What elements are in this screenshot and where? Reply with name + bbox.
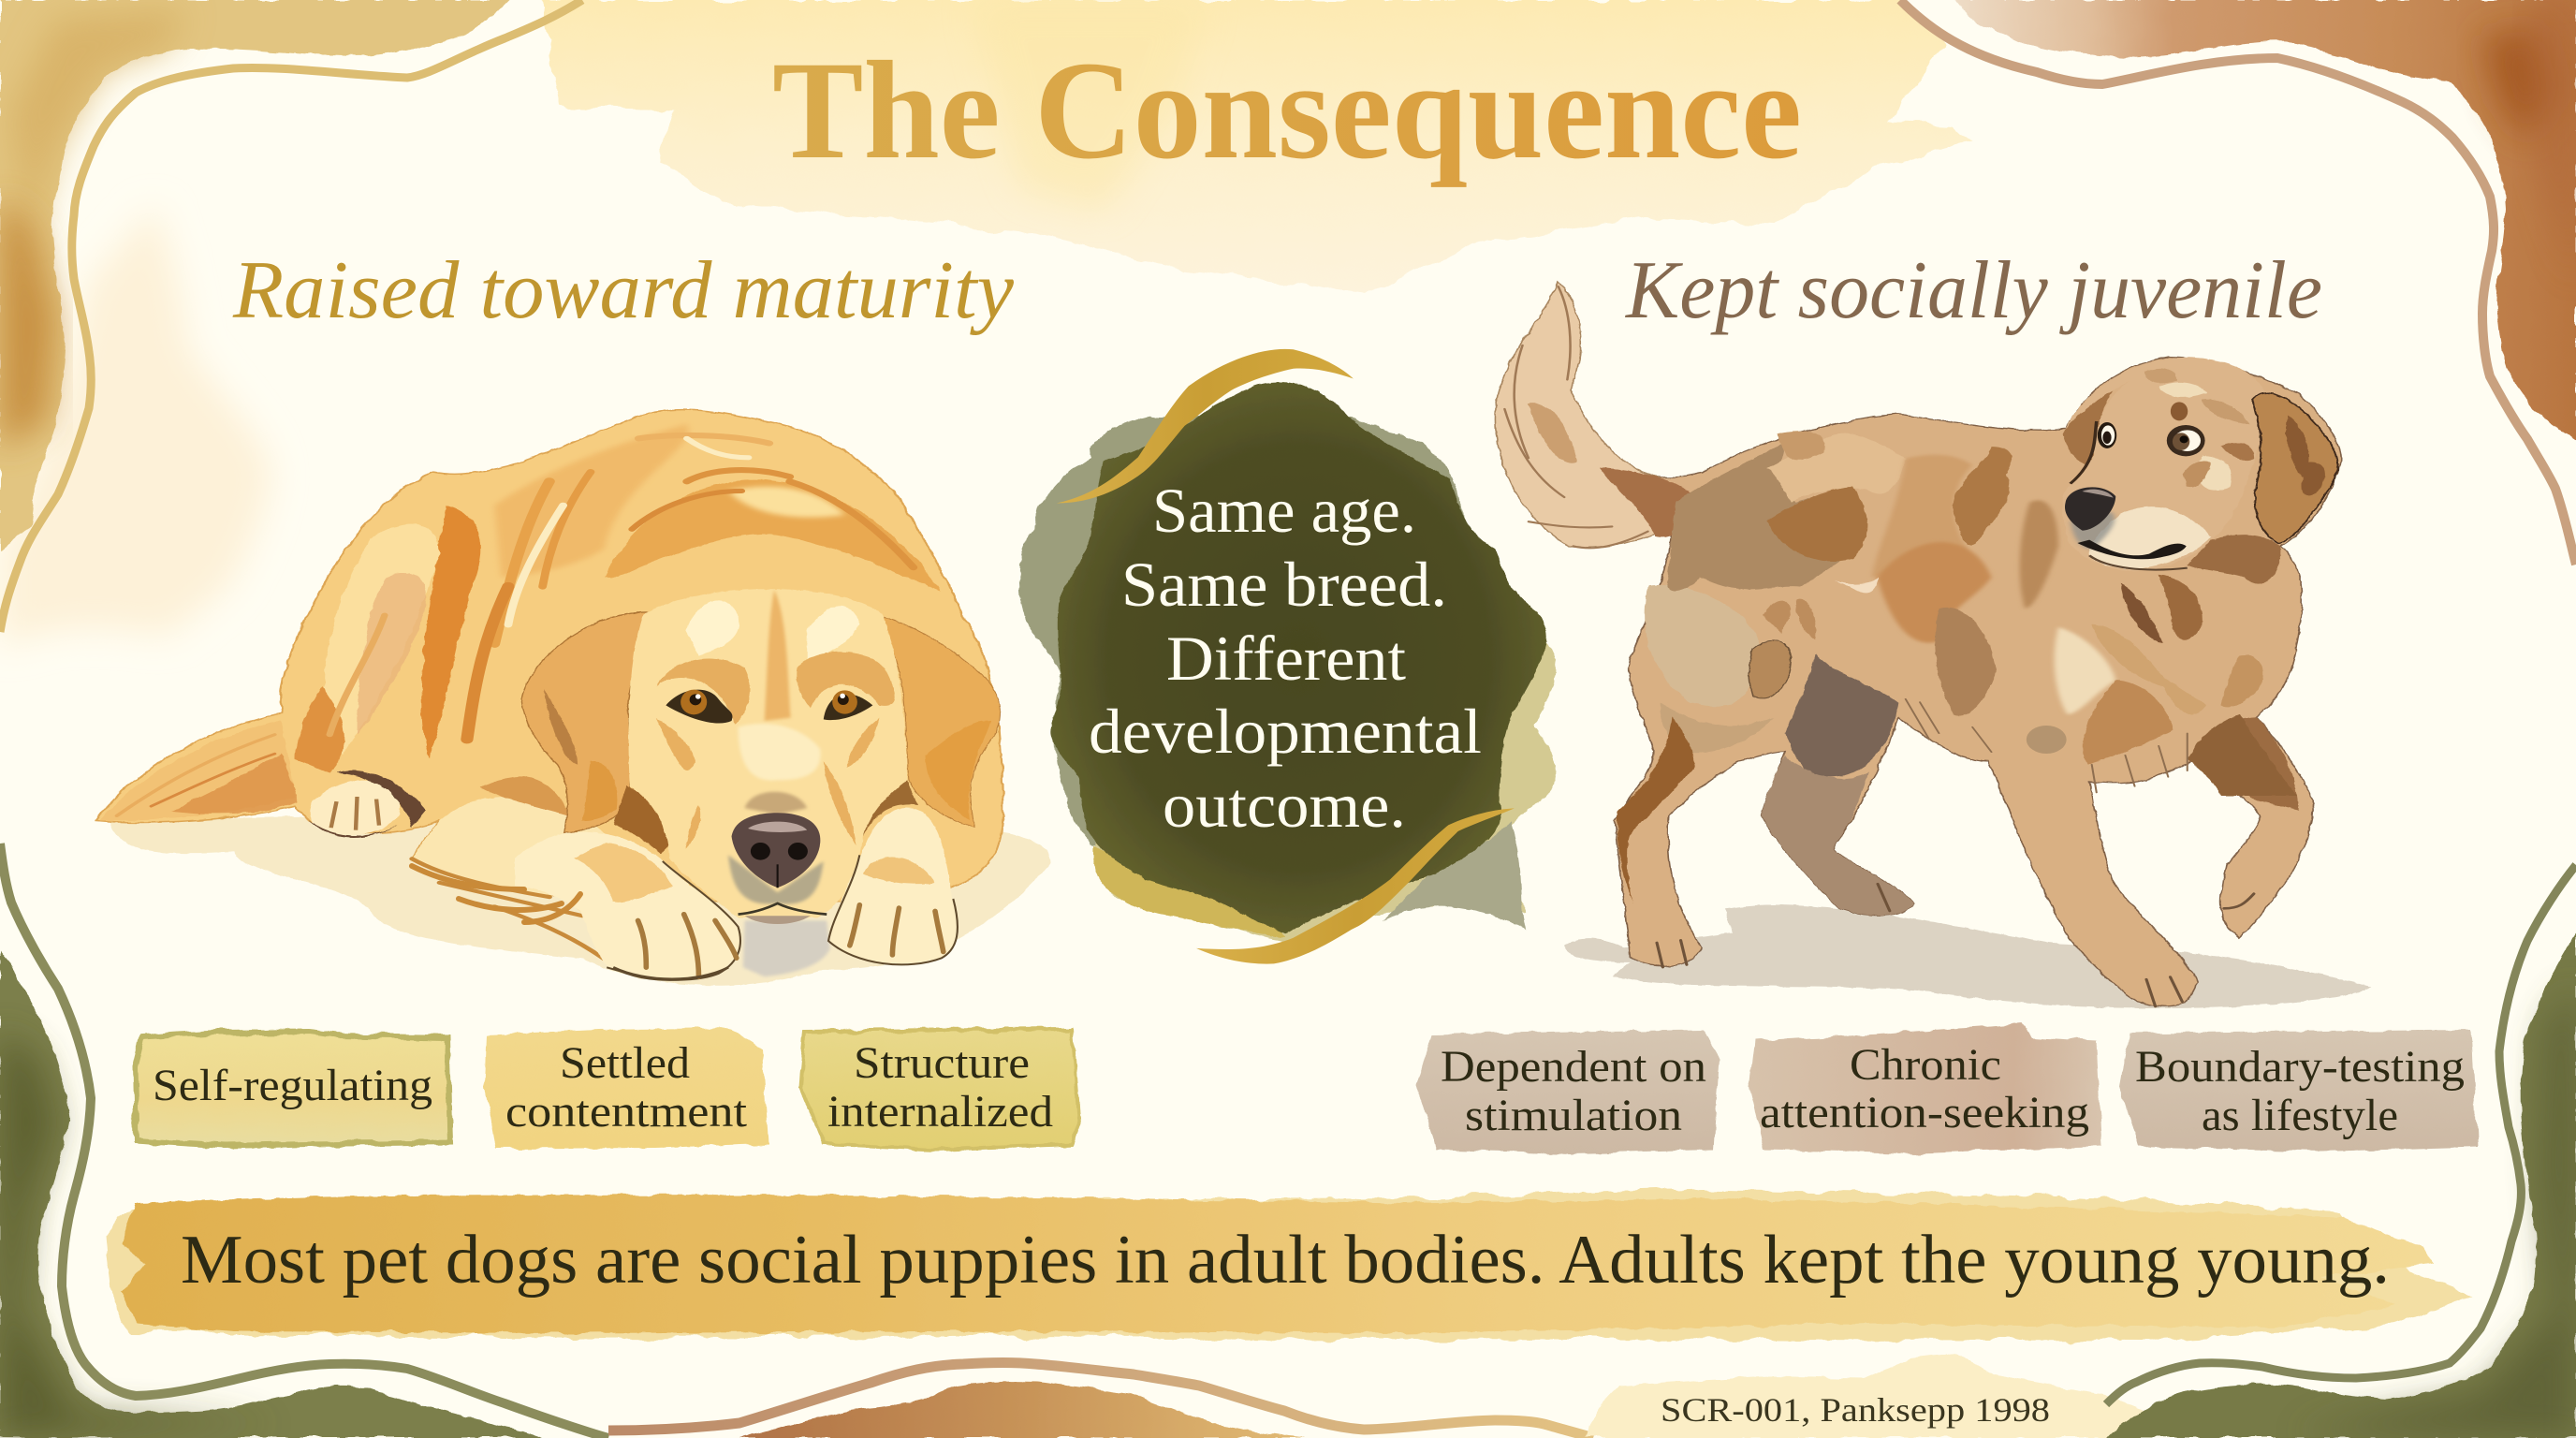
chest shade (481, 776, 570, 815)
tag: boundary-testing as lifestyle (2120, 1030, 2478, 1152)
left brow (656, 659, 750, 724)
side chest patch (2220, 655, 2262, 707)
haunch highlight (324, 524, 440, 754)
watercolor wash: citation background (1586, 1353, 2152, 1438)
right foreleg patch (863, 858, 935, 884)
left ear sliver (2063, 381, 2120, 465)
left ear (521, 612, 663, 833)
centre badge text: Same breed. (1121, 549, 1447, 620)
corner wash: bottom left olive (0, 949, 543, 1438)
back upper shading (494, 424, 688, 577)
small grey patch (2027, 726, 2067, 754)
rump rust (1600, 468, 1702, 537)
shoulder patch (1954, 447, 2012, 545)
dog shadow (1564, 905, 2370, 1008)
tag: structure internalized (800, 1029, 1079, 1150)
head patches (2144, 368, 2254, 491)
belly fur strands (412, 866, 580, 922)
back fur arc (605, 480, 941, 592)
haunch orange streak (421, 506, 480, 758)
takeaway banner (105, 1189, 2472, 1341)
brow spot (2171, 402, 2188, 420)
centre badge text: Same age. (1152, 475, 1416, 546)
centre badge: olive watercolor blob (1019, 349, 1556, 964)
frame line: bottom left olive (0, 844, 608, 1438)
dog shadow (110, 815, 1051, 986)
fur fringe strokes (1906, 699, 2188, 793)
watercolor wash: title background (543, 0, 1971, 293)
illustration: anxious brown dog walking (1495, 282, 2370, 1008)
mouth (2077, 540, 2187, 559)
back pale area (1767, 433, 1906, 503)
corner wash: top left darker mottling (9, 9, 187, 243)
ear patches (2287, 415, 2324, 496)
face shade (613, 786, 672, 854)
banner text: Most pet dogs are social puppies in adult bodies. Adults kept the young young. (181, 1222, 2390, 1299)
grey muzzle (728, 855, 824, 904)
lower chest brown (2084, 681, 2173, 765)
corner wash: top right rust spot (2481, 28, 2560, 140)
pale olive outer wash (1019, 411, 1502, 871)
far rear leg (1762, 756, 1913, 916)
gold brush stroke top (1057, 349, 1354, 503)
banner wash (122, 1195, 2434, 1333)
right face shade (863, 780, 918, 836)
citation: SCR-001, Panksepp 1998 (1661, 1391, 2050, 1429)
right foreleg (830, 808, 957, 963)
back paw shadow (309, 770, 426, 837)
flank small patches (1763, 598, 1816, 639)
centre badge text: developmental (1089, 696, 1482, 767)
centre badge text: Different (1166, 623, 1406, 694)
right eye (824, 690, 872, 720)
frame line: top right tan (1900, 0, 2576, 565)
tail inner patch (1529, 404, 1576, 463)
upper flank orange (1872, 455, 1972, 578)
tag: settled contentment: Settled (560, 1038, 690, 1088)
corner wash: bottom right dark mottling (2293, 983, 2576, 1438)
corner wash: bottom left dark mottling (0, 1030, 281, 1438)
left foreleg patch (574, 843, 672, 902)
toe marks (1657, 884, 2254, 1006)
neck dark (2188, 535, 2280, 584)
tag: dependent on stimulation (1416, 1030, 1720, 1153)
chest mid patch (2092, 624, 2206, 714)
centre badge text: outcome. (1163, 770, 1406, 841)
banner pale edge (105, 1189, 2472, 1341)
golden lower right wash (1095, 628, 1556, 942)
corner wash: top left gold (0, 0, 508, 550)
heading: raised toward maturity: Raised toward maturity (232, 245, 1015, 336)
right paw toes (850, 905, 944, 955)
left ear shade (545, 690, 578, 765)
right paw outline (828, 855, 958, 964)
tag: self-regulating (135, 1032, 450, 1146)
centre badge text (1089, 475, 1482, 841)
back paw toes (331, 797, 379, 830)
nose (2065, 487, 2115, 531)
lower lip line (2089, 555, 2188, 570)
gold brush stroke bottom (1196, 808, 1515, 964)
right brow (797, 652, 895, 709)
corner wash: left orange deepening (0, 197, 56, 449)
face base (629, 589, 907, 917)
left eye (2098, 422, 2116, 448)
throat brown (2159, 574, 2203, 640)
watercolor wash: left pale peach (0, 206, 271, 646)
left ear orange (582, 761, 617, 821)
frame line: bottom centre tan (608, 1363, 1593, 1438)
tag: settled contentment (485, 1028, 768, 1149)
ear (2252, 393, 2338, 543)
left paw toes (638, 915, 737, 976)
frame line: bottom right olive (2106, 865, 2576, 1404)
frame line: top left gold (0, 0, 582, 632)
rear lower side (1660, 703, 1773, 753)
dog body silhouette (96, 410, 1003, 902)
back paw (310, 780, 401, 835)
rear pale side (1645, 585, 1762, 706)
dark rear thigh (1785, 653, 1898, 777)
corner wash: bottom centre brown (739, 1382, 1305, 1438)
cheek markings (656, 718, 879, 849)
corner wash: top right brown (1954, 0, 2576, 440)
illustration: calm golden dog lying down (96, 410, 1051, 986)
rear square patch (1749, 640, 1791, 698)
haunch pink shading (358, 573, 426, 735)
mid orange wash (1877, 542, 1992, 643)
heading: kept socially juvenile: Kept socially juvenile (1624, 245, 2322, 336)
tail strands (1504, 286, 1647, 548)
muzzle pale (2089, 506, 2211, 569)
tag: structure internalized: Structure (854, 1038, 1030, 1088)
chest dark strip (2120, 583, 2163, 643)
chest light area (412, 797, 687, 921)
back tan patch (1777, 431, 1825, 460)
chest highlight (2055, 627, 2115, 714)
rump mottled patch (1667, 442, 1867, 592)
muzzle light (739, 724, 821, 781)
rear leg rust streak (1617, 717, 1694, 903)
left eye (666, 690, 732, 724)
right eye (2167, 425, 2205, 456)
belly notch highlight (1834, 578, 1880, 593)
muzzle top shade (745, 792, 807, 814)
tag: self-regulating: Self-regulating (153, 1061, 432, 1110)
gold lower left wash (1093, 846, 1285, 938)
left foreleg outline (607, 861, 740, 980)
watercolor accent: title wash streak (973, 0, 1208, 211)
nose (732, 813, 820, 888)
floor shadow under chin (743, 920, 830, 976)
tag: chronic attention-seeking (1749, 1023, 2102, 1153)
belly fur strokes (412, 858, 605, 959)
lower lip (745, 916, 811, 924)
grey muzzle shadow (2071, 512, 2115, 550)
grey olive lower right (1383, 821, 1526, 930)
forehead highlight left (685, 600, 739, 655)
head dark edge (2071, 421, 2097, 484)
tag: structure internalized: internalized (827, 1087, 1053, 1137)
tag: dependent on stimulation: stimulation (1465, 1091, 1682, 1140)
fur strokes (117, 435, 914, 815)
corner wash: right rust streak (2527, 0, 2576, 281)
left foreleg (515, 832, 741, 981)
tag: chronic attention-seeking: attention-seeking (1760, 1088, 2089, 1137)
dog tail (99, 720, 295, 821)
tag: dependent on stimulation: Dependent on (1441, 1042, 1706, 1092)
dog body silhouette (1612, 358, 2341, 1006)
far foreleg upper (2188, 714, 2297, 796)
forehead highlight right (807, 606, 859, 662)
dark olive core (1050, 382, 1546, 933)
tag: settled contentment: contentment (505, 1087, 748, 1137)
corner wash: bottom right olive (2106, 933, 2576, 1438)
tag: boundary-testing as lifestyle: Boundary-testing (2135, 1042, 2465, 1092)
title: The Consequence (772, 33, 1802, 188)
right ear orange (926, 721, 991, 821)
neck shading strip (2020, 500, 2058, 609)
flank brown patch (1767, 487, 1867, 562)
belly tall patch (1935, 608, 1997, 716)
head (2062, 358, 2268, 571)
shoulder highlight (728, 487, 844, 518)
tail shadow streak (171, 754, 299, 814)
left paw shadow (613, 967, 728, 979)
mouth line (739, 903, 827, 915)
far foreleg shade (2191, 717, 2299, 811)
tag: chronic attention-seeking: Chronic (1850, 1040, 2001, 1090)
tail (1495, 282, 1672, 548)
rear leg shade (295, 687, 344, 773)
tag: boundary-testing as lifestyle: as lifestyle (2202, 1091, 2398, 1140)
right ear (872, 615, 1000, 827)
forehead centre stripe (765, 590, 791, 721)
